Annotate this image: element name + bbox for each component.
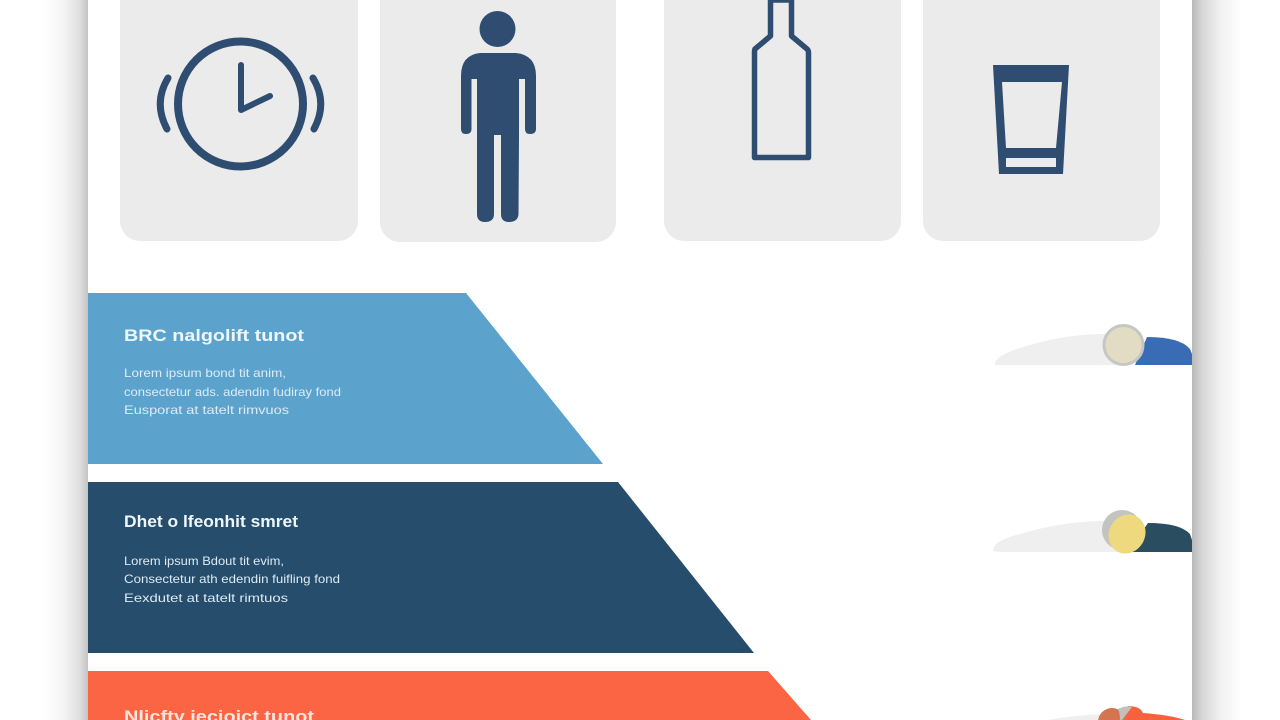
panel: body tile xyxy=(380,0,616,242)
band: orange xyxy=(88,671,811,720)
band: diet xyxy=(88,482,754,653)
panel: time tile xyxy=(120,0,358,241)
gauge: blue xyxy=(995,326,1192,365)
icon: clock xyxy=(160,42,321,166)
panel: bottle tile xyxy=(664,0,901,241)
page shadow: right xyxy=(1192,0,1242,720)
band body text: Lorem ipsum bond tit anim, xyxy=(124,366,286,380)
band body text: Eusporat at tatelt rimvuos xyxy=(124,403,289,417)
band body text xyxy=(124,366,341,417)
band body text xyxy=(124,554,340,605)
icon: bottle xyxy=(754,0,808,158)
icon: glass xyxy=(993,65,1069,174)
gauge: navy xyxy=(993,508,1192,560)
panel: glass tile xyxy=(923,0,1160,241)
band heading: Dhet o lfeonhit smret xyxy=(124,512,298,531)
band body text: consectetur ads. adendin fudiray fond xyxy=(124,385,341,399)
band body text: Consectetur ath edendin fuifling fond xyxy=(124,572,340,586)
gauge: orange xyxy=(1048,706,1185,720)
band: BAC xyxy=(88,293,603,464)
page shadow: left xyxy=(44,0,88,720)
band body text: Eexdutet at tatelt rimtuos xyxy=(124,591,288,605)
band body text: Lorem ipsum Bdout tit evim, xyxy=(124,554,284,568)
band heading: BRC nalgolift tunot xyxy=(124,326,304,345)
icon: person xyxy=(461,11,536,222)
